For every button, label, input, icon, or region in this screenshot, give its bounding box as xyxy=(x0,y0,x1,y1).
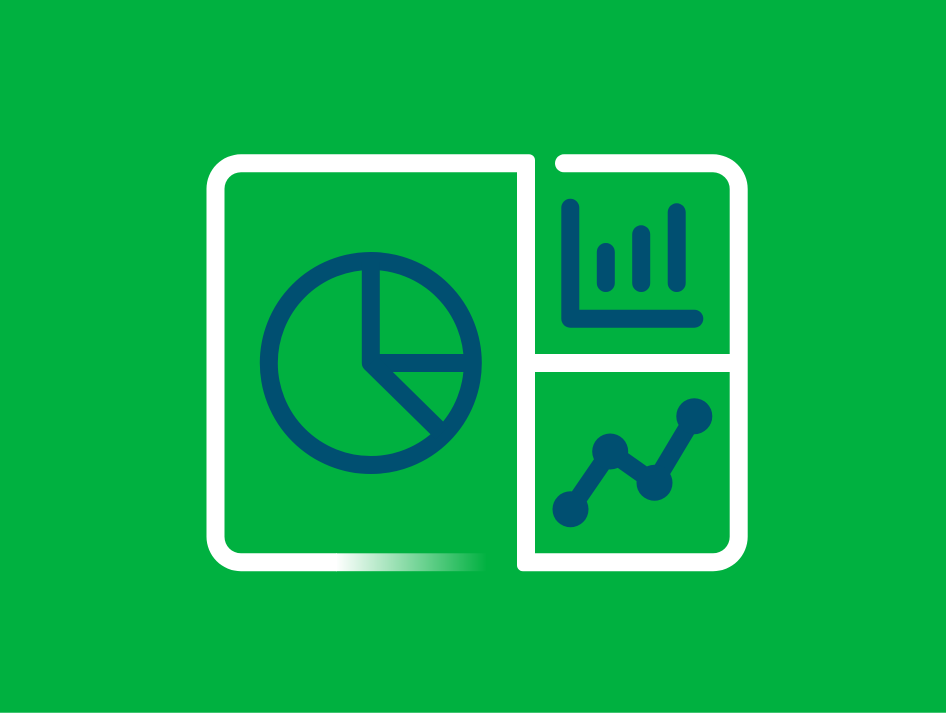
icon: pie chart xyxy=(269,261,473,465)
icon: line chart xyxy=(552,398,712,527)
fading frame segment xyxy=(336,553,487,571)
icon: dashboard frame xyxy=(206,154,748,571)
icon: bar chart xyxy=(570,208,694,319)
